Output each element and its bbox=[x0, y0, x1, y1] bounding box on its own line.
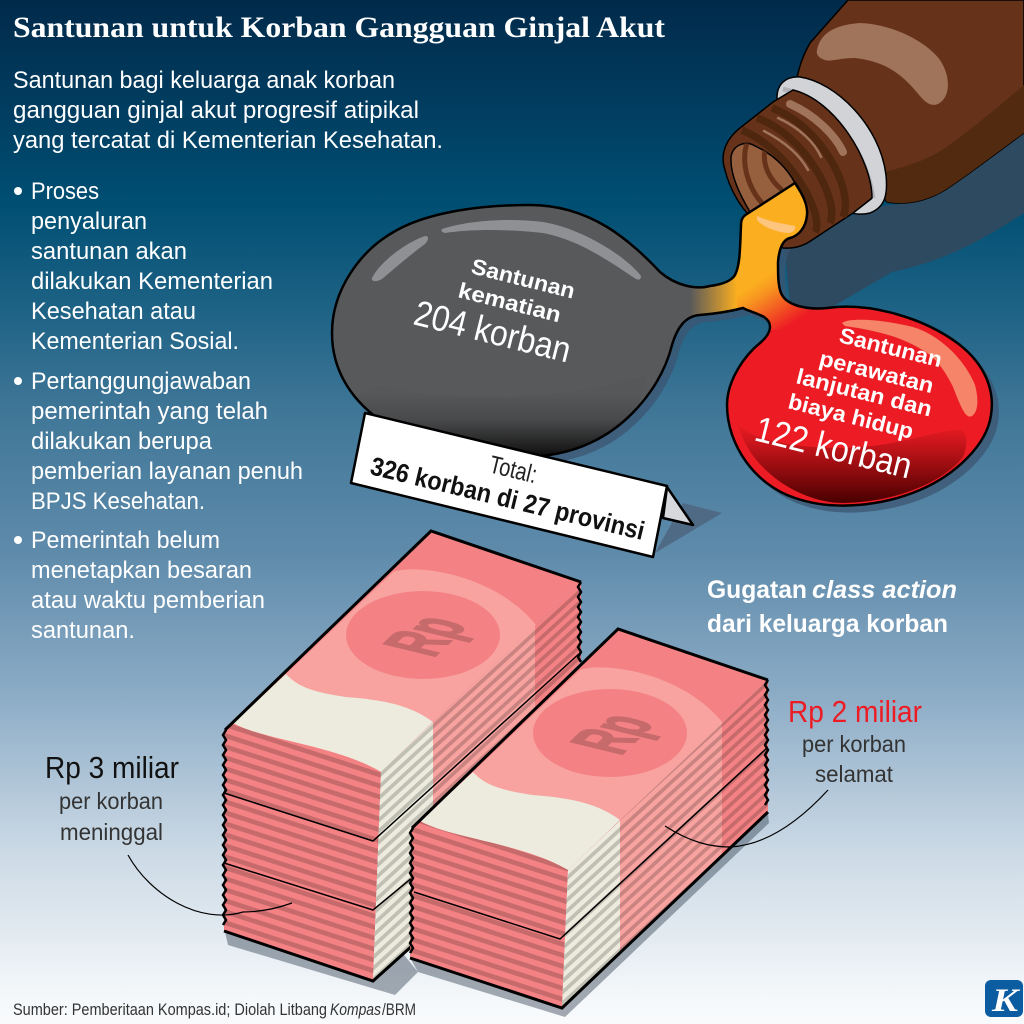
leader line: selamat bbox=[665, 790, 828, 847]
bullet 1: dilakukan Kementerian bbox=[31, 268, 273, 295]
bullet 1: penyaluran bbox=[31, 208, 147, 235]
stack shadows bbox=[225, 805, 769, 1017]
label: Rp 3 miliar: per korban bbox=[59, 788, 163, 814]
bullet 1 bbox=[14, 178, 273, 355]
bullet 1: Kesehatan atau bbox=[31, 298, 196, 325]
label: santunan perawatan: lanjutan dan bbox=[794, 364, 935, 421]
total sign bbox=[351, 413, 722, 557]
label: santunan perawatan: perawatan bbox=[817, 346, 936, 398]
label: santunan kematian: Santunan bbox=[469, 254, 578, 303]
bullet 1: Kementerian Sosial. bbox=[31, 328, 239, 355]
label: santunan kematian: 204 korban bbox=[410, 292, 575, 370]
label: santunan perawatan: biaya hidup bbox=[786, 389, 916, 444]
bullet 2: pemberian layanan penuh bbox=[31, 458, 303, 485]
bullet 1: santunan akan bbox=[31, 238, 187, 265]
liquid blobs shadow bbox=[339, 190, 999, 513]
icon: Kompas logo: K bbox=[991, 983, 1020, 1019]
money stack: right, Rp 2 miliar: Rp bbox=[553, 707, 671, 760]
bullet 2: pemerintah yang telah bbox=[31, 398, 268, 425]
bullet 2: BPJS Kesehatan. bbox=[31, 488, 205, 515]
label: Rp 3 miliar: Rp 3 miliar bbox=[45, 750, 179, 785]
bullet 3 bbox=[14, 527, 265, 644]
intro text block: gangguan ginjal akut progresif atipikal bbox=[13, 97, 419, 124]
icon: medicine bottle bbox=[723, 0, 1024, 248]
bullet 3: Pemerintah belum bbox=[31, 527, 220, 554]
money stack: left, Rp 3 miliar bbox=[223, 531, 585, 990]
label: class action: dari keluarga korban bbox=[707, 610, 948, 638]
bullet 2 bbox=[14, 368, 303, 515]
bullet list bbox=[14, 178, 303, 644]
label: Rp 3 miliar bbox=[45, 750, 179, 845]
label: class action: Gugatan bbox=[707, 576, 807, 604]
bullet 3: santunan. bbox=[31, 617, 135, 644]
intro text block bbox=[13, 67, 443, 154]
bullet 2: Pertanggungjawaban bbox=[31, 368, 251, 395]
liquid: syrup and blobs bbox=[332, 170, 1007, 520]
title: Santunan untuk Korban Gangguan Ginjal Akut bbox=[13, 11, 665, 44]
label: santunan kematian bbox=[410, 254, 578, 370]
leader line: meninggal bbox=[128, 855, 292, 915]
label: Rp 2 miliar: selamat bbox=[815, 761, 894, 787]
source credit: Kompas bbox=[330, 1000, 381, 1019]
source credit: Sumber: Pemberitaan Kompas.id; Diolah Litbang bbox=[13, 1000, 327, 1019]
label: Rp 2 miliar: Rp 2 miliar bbox=[788, 694, 922, 729]
label: class action: class action bbox=[812, 576, 957, 604]
bullet 3: menetapkan besaran bbox=[31, 557, 252, 584]
bottle shadow bbox=[785, 133, 1024, 310]
label: santunan perawatan: Santunan bbox=[837, 323, 945, 372]
money stack: left, Rp 3 miliar: Rp bbox=[366, 609, 484, 662]
intro text block: yang tercatat di Kementerian Kesehatan. bbox=[13, 127, 443, 154]
money stack: right, Rp 2 miliar bbox=[410, 629, 772, 1015]
label: Rp 2 miliar bbox=[788, 694, 922, 787]
total sign: Total: bbox=[487, 451, 540, 489]
label: class action bbox=[707, 576, 957, 638]
bullet 1: Proses bbox=[31, 178, 99, 205]
label: Rp 2 miliar: per korban bbox=[802, 731, 906, 757]
total sign: 326 korban di 27 provinsi bbox=[368, 451, 648, 546]
icon: Kompas logo bbox=[985, 980, 1023, 1019]
intro text block: Santunan bagi keluarga anak korban bbox=[13, 67, 395, 94]
source credit: /BRM bbox=[382, 1000, 416, 1019]
bullet 2: dilakukan berupa bbox=[31, 428, 213, 455]
label: santunan perawatan: 122 korban bbox=[751, 408, 916, 486]
label: santunan perawatan bbox=[751, 323, 945, 486]
label: Rp 3 miliar: meninggal bbox=[60, 819, 163, 845]
bullet 3: atau waktu pemberian bbox=[31, 587, 265, 614]
label: santunan kematian: kematian bbox=[456, 278, 564, 327]
